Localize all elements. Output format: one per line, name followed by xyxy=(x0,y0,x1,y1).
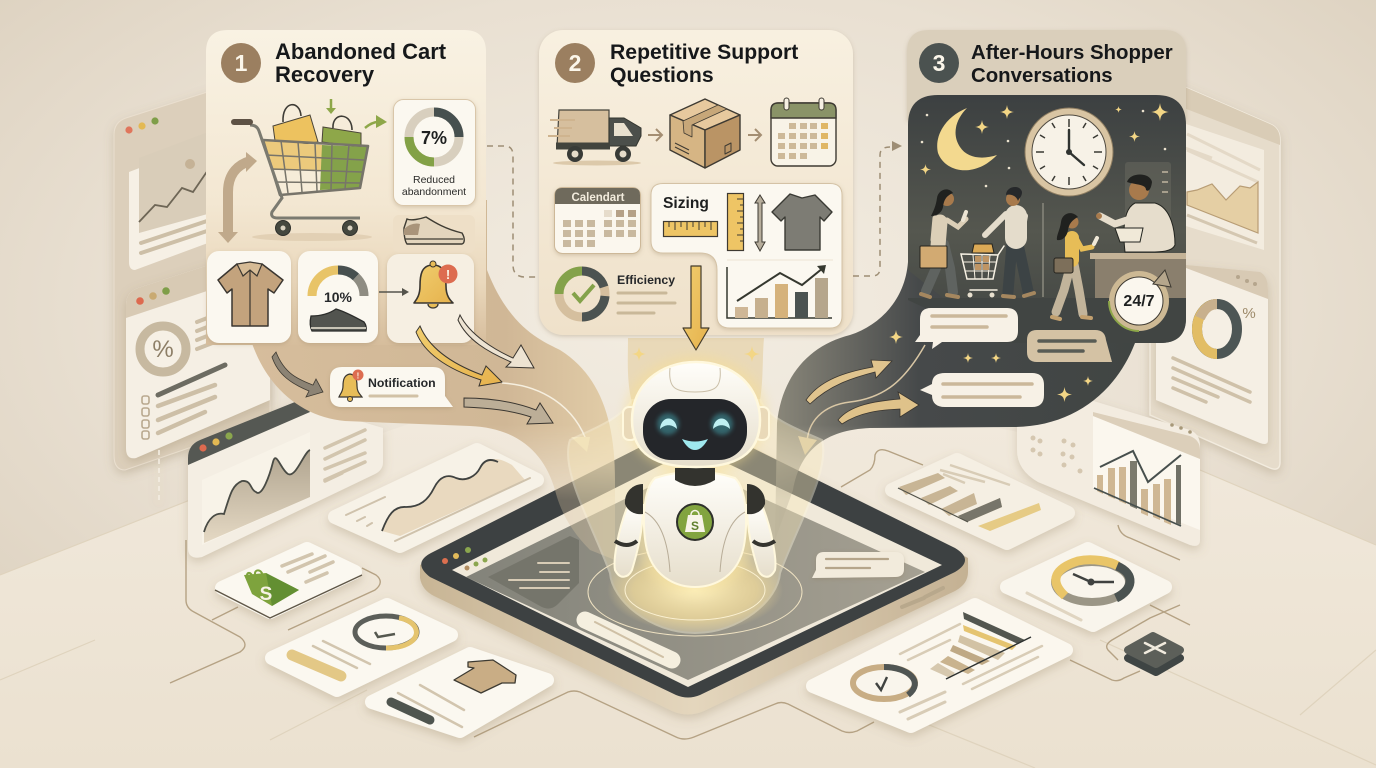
badge 2 xyxy=(555,43,595,83)
decorative circuit connector lines xyxy=(170,450,1190,739)
back-left browser window with line chart xyxy=(114,72,270,470)
arrow box to calendar xyxy=(748,129,761,141)
card: clock check xyxy=(272,605,451,690)
badge 3: 3 xyxy=(933,50,945,76)
card: 7% reduced abandonment: Reduced xyxy=(413,174,455,186)
flow band from panel 3 to robot xyxy=(776,262,1135,509)
thin return arrow xyxy=(798,345,925,455)
night stars xyxy=(920,103,1169,187)
efficiency label: Efficiency xyxy=(617,273,675,287)
Sizing card xyxy=(651,184,842,328)
grey arrow right xyxy=(464,398,553,424)
sparkles above robot xyxy=(632,346,760,362)
notification bubble xyxy=(330,367,453,407)
body seam lines xyxy=(645,512,745,572)
efficiency donut with check xyxy=(559,271,605,317)
shopper with phone xyxy=(1052,213,1097,319)
robot ear pods xyxy=(623,407,769,440)
white arrow xyxy=(458,315,534,368)
yellow arrow xyxy=(416,326,502,386)
thin arrow to robot xyxy=(502,383,590,452)
card: 7% reduced abandonment: 7% xyxy=(421,128,447,148)
robot arms xyxy=(615,484,775,577)
chat bubble tan xyxy=(1027,330,1112,362)
card: 7% reduced abandonment xyxy=(394,100,476,206)
crescent moon xyxy=(937,108,997,170)
chat bubble white top xyxy=(915,308,1018,349)
delivery truck icon xyxy=(548,110,641,166)
Shopify logo badge: S xyxy=(691,519,699,533)
Calendart card xyxy=(554,188,640,254)
tile: 10% gauge and sneaker: 10% xyxy=(324,289,353,305)
yellow down arrow to robot xyxy=(683,266,709,350)
heading 2: Questions xyxy=(610,64,714,87)
heading 3: After-Hours Shopper xyxy=(971,42,1173,64)
night scene panel xyxy=(908,95,1186,343)
chat bubble white bottom xyxy=(920,373,1044,407)
panel 1 overflow arrows and notification xyxy=(272,315,590,452)
24/7 badge: 24/7 xyxy=(1123,293,1155,310)
light column behind robot head xyxy=(628,338,764,410)
tile: shirt xyxy=(207,251,291,343)
robot head xyxy=(632,362,760,467)
scene floor and shelf xyxy=(908,162,1186,343)
Calendart card: Calendart xyxy=(571,192,625,204)
right monitor with bar and line chart xyxy=(1017,400,1200,546)
back-left browser window with percent donut xyxy=(126,245,270,500)
back-left browser window with percent donut: % xyxy=(152,336,174,363)
yellow arrow lower xyxy=(838,392,919,424)
card: timer gauge xyxy=(1007,549,1165,625)
shopping cart icon xyxy=(234,105,372,241)
Shopify logo badge xyxy=(677,504,713,540)
robot mascot xyxy=(615,362,775,587)
flow band from panel 1 to robot xyxy=(248,200,615,560)
parcel box icon xyxy=(670,99,740,168)
arrow truck to box xyxy=(648,129,662,141)
card: shirt xyxy=(372,654,547,731)
up and down curved arrow xyxy=(218,152,257,243)
robot glow halo xyxy=(568,355,823,636)
key icon: close button xyxy=(1128,636,1180,672)
card: mini bar chart xyxy=(892,460,1068,543)
wall clock xyxy=(1025,108,1113,196)
back-right browser window with donut xyxy=(1156,265,1268,444)
card: wave chart xyxy=(335,450,537,546)
badge 3 xyxy=(919,43,959,83)
calendar icon xyxy=(771,98,836,166)
yellow arrow upper xyxy=(806,360,892,404)
shopper pushing cart xyxy=(961,187,1034,298)
badge 2: 2 xyxy=(569,50,581,76)
heading 1: Recovery xyxy=(275,62,375,87)
notification bubble: ! xyxy=(357,372,359,380)
efficiency label xyxy=(617,273,675,313)
small arrow to bell xyxy=(379,288,409,296)
back-right browser window with donut: % xyxy=(1242,305,1256,322)
panel 3: After-Hours Shopper Conversations xyxy=(889,30,1186,407)
robot body xyxy=(644,472,746,587)
robot visor xyxy=(643,399,747,460)
panel 2: Repetitive Support Questions xyxy=(539,30,853,350)
head crown line xyxy=(670,368,720,392)
floating pill on tablet xyxy=(585,620,672,660)
shoe tile xyxy=(393,215,475,253)
left monitor with area chart xyxy=(188,400,383,558)
tile: bell alert xyxy=(387,254,474,343)
heading 3: Conversations xyxy=(971,65,1113,87)
dashed connector between panels 1 and 2 xyxy=(487,146,540,277)
incoming arrows from panel 3 xyxy=(798,345,925,455)
tablet device xyxy=(420,420,968,714)
back-right browser window with area chart xyxy=(1150,72,1280,469)
card: Shopify bag: S xyxy=(260,584,272,605)
support clerk at counter xyxy=(1090,174,1186,298)
green arrows xyxy=(326,99,387,128)
badge 1: 1 xyxy=(235,50,248,76)
Sizing card: Sizing xyxy=(663,195,709,212)
card: Shopify bag xyxy=(215,549,362,618)
bar and trend chart xyxy=(727,265,832,318)
card: 7% reduced abandonment: abandonment xyxy=(402,186,466,198)
shopper with bag xyxy=(920,189,966,297)
card: bar report with timer xyxy=(813,605,1066,726)
grey arrow to notification xyxy=(272,352,323,397)
heading 2: Repetitive Support xyxy=(610,41,798,64)
robot face xyxy=(657,413,733,450)
flow stars xyxy=(889,330,1093,402)
robot neck xyxy=(675,468,715,486)
badge 1 xyxy=(221,43,261,83)
tile: bell alert: ! xyxy=(446,267,450,282)
dashed connector between panels 2 and 3 xyxy=(853,141,902,276)
24/7 badge xyxy=(1109,270,1171,331)
tile: 10% gauge and sneaker xyxy=(298,251,378,343)
chat bubble on tablet xyxy=(812,552,904,578)
panel 1: Abandoned Cart Recovery xyxy=(206,30,486,345)
heading 1: Abandoned Cart xyxy=(275,39,447,64)
notification bubble: Notification xyxy=(368,376,436,390)
